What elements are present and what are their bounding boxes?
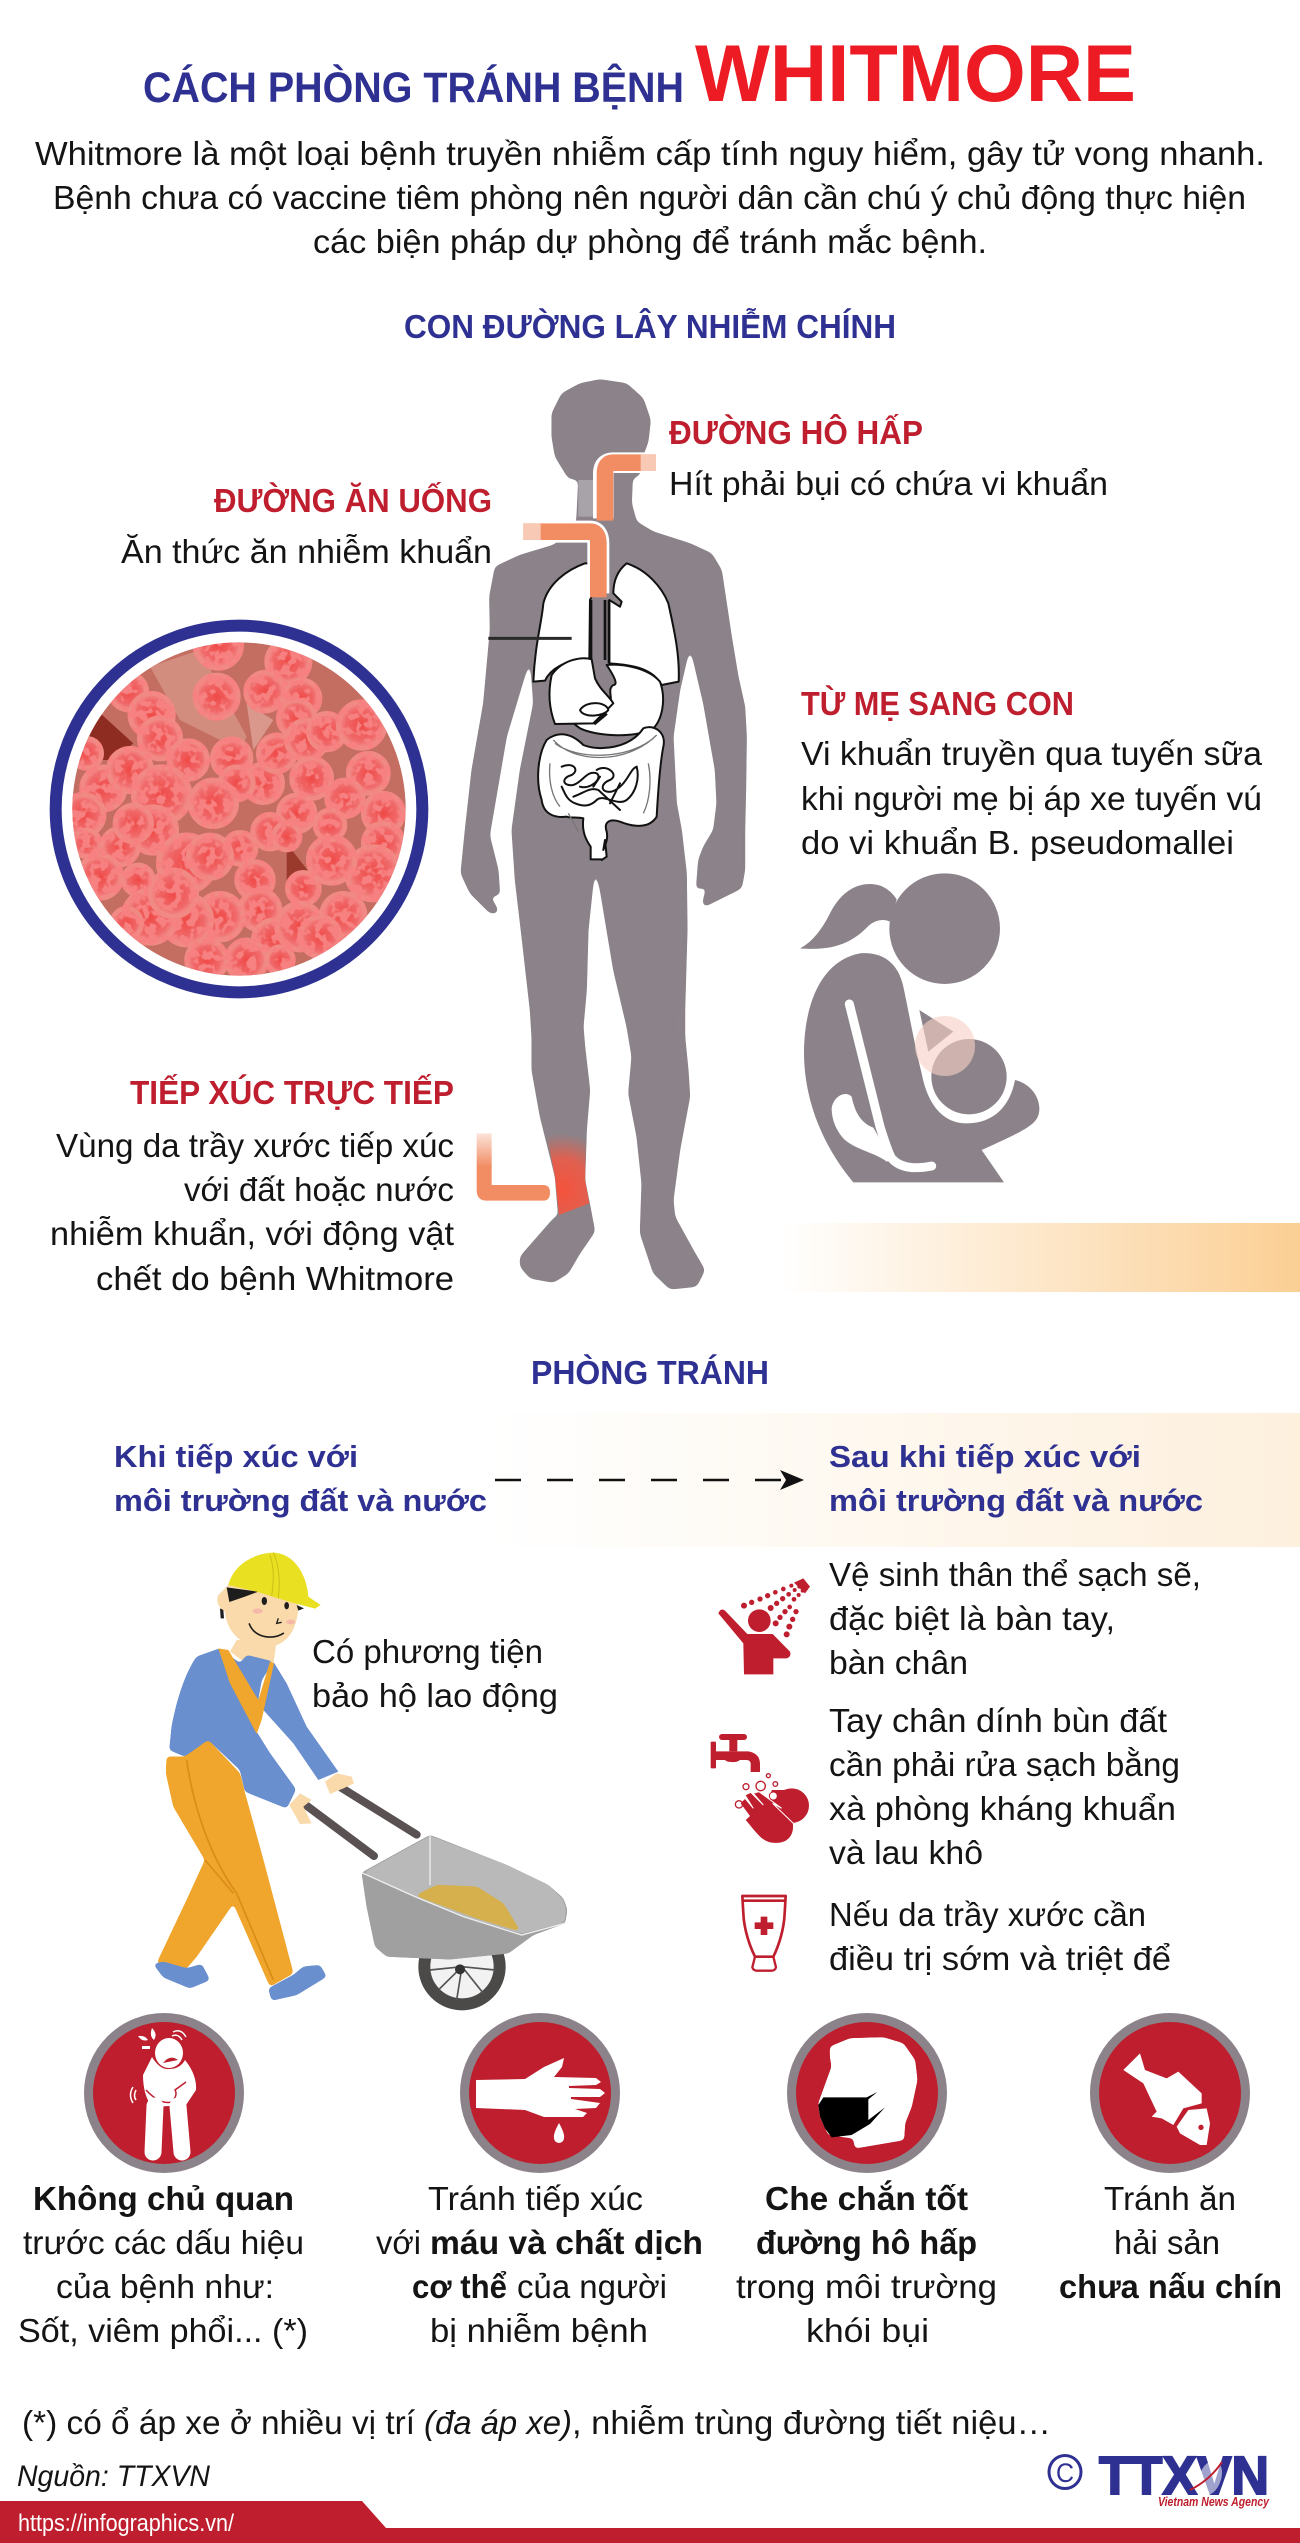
icon: head with mask [792, 2018, 942, 2168]
icon: ointment tube [742, 1896, 786, 1971]
icon: breastfeeding mother [800, 873, 1039, 1182]
cream decorative band [490, 1413, 1300, 1547]
text: protective equipment: Có phương tiện [312, 1633, 543, 1670]
label: direct contact route [50, 1074, 454, 1297]
text: do not be complacent: trước các dấu hiệu [23, 2224, 304, 2261]
text: body hygiene: Vệ sinh thân thể sạch sẽ, [829, 1556, 1201, 1593]
icon: shower [718, 1578, 810, 1674]
text: body hygiene: đặc biệt là bàn tay, [829, 1600, 1115, 1637]
text: cover respiratory tract [736, 2180, 997, 2349]
text: avoid blood contact: máu và chất dịch [430, 2224, 703, 2261]
text: cover respiratory tract: Che chắn tốt [765, 2180, 968, 2217]
text: do not be complacent: Không chủ quan [33, 2180, 294, 2217]
title: CÁCH PHÒNG TRÁNH BỆNH [143, 63, 684, 112]
intro paragraph: Bệnh chưa có vaccine tiêm phòng nên người dân cần chú ý chủ động thực hiện [53, 179, 1246, 216]
label: direct contact route: nhiễm khuẩn, với động vật [50, 1215, 454, 1252]
text: washing hands: cần phải rửa sạch bằng [829, 1746, 1180, 1783]
text: avoid undercooked seafood: hải sản [1114, 2224, 1220, 2261]
worker neck and face [217, 1583, 304, 1673]
footnote: (đa áp xe) [424, 2404, 572, 2441]
route pipe: digestive [523, 523, 598, 597]
esophagus [591, 600, 609, 663]
icon: bleeding hand [464, 2018, 616, 2168]
text: washing hands: xà phòng kháng khuẩn [829, 1790, 1176, 1827]
label: ingestion route: Ăn thức ăn nhiễm khuẩn [121, 533, 492, 570]
text: cover respiratory tract: trong môi trường [736, 2268, 997, 2305]
overalls [157, 1648, 293, 1987]
label: respiratory route: Hít phải bụi có chứa vi khuẩn [669, 465, 1108, 502]
text: body hygiene: bàn chân [829, 1644, 968, 1681]
intro paragraph: các biện pháp dự phòng để tránh mắc bệnh. [313, 223, 987, 260]
text: avoid blood contact: với [376, 2224, 421, 2261]
icon: faucet and washing hands [711, 1734, 809, 1843]
text: washing hands: và lau khô [829, 1834, 983, 1871]
logo: TTXVN: TTXVN [1099, 2446, 1269, 2506]
shoes [153, 1962, 327, 2001]
intro paragraph: Whitmore là một loại bệnh truyền nhiễm cấp tính nguy hiểm, gây tử vong nhanh. [35, 135, 1265, 172]
wheel [424, 1929, 500, 2004]
barrow handles [306, 1787, 417, 1856]
orange decorative band [780, 1223, 1300, 1292]
text: avoid undercooked seafood [1059, 2180, 1282, 2305]
source: Nguồn: TTXVN [17, 2460, 210, 2493]
text: protective equipment [312, 1633, 558, 1714]
label: respiratory route: ĐƯỜNG HÔ HẤP [669, 413, 923, 451]
footer bar [0, 2501, 1300, 2543]
text: do not be complacent: của bệnh như: [56, 2268, 274, 2305]
illustration: worker with wheelbarrow [153, 1553, 567, 2004]
pointer line [488, 634, 572, 643]
subheading: during contact: Khi tiếp xúc với [114, 1439, 358, 1474]
liver and stomach [549, 658, 663, 735]
logo: TTXVN: Vietnam News Agency [1158, 2494, 1270, 2509]
hands [289, 1773, 354, 1824]
route pipe: respiratory [603, 454, 656, 521]
text: treat skin abrasions: điều trị sớm và triệt để [829, 1940, 1171, 1977]
subheading: during contact: môi trường đất và nước [114, 1483, 487, 1518]
text: avoid blood contact [376, 2180, 703, 2349]
text: treat skin abrasions [829, 1896, 1171, 1977]
label: direct contact route: với đất hoặc nước [184, 1171, 454, 1208]
subheading: after contact: Sau khi tiếp xúc với [829, 1439, 1141, 1474]
text: protective equipment: bảo hộ lao động [312, 1677, 558, 1714]
label: mother to child route: Vi khuẩn truyền qua tuyến sữa [801, 735, 1263, 772]
text: body hygiene [829, 1556, 1201, 1681]
helmet [228, 1553, 321, 1609]
text: cover respiratory tract: khói bụi [806, 2312, 929, 2349]
label: mother to child route: TỪ MẸ SANG CON [801, 685, 1074, 722]
label: direct contact route: TIẾP XÚC TRỰC TIẾP [130, 1074, 454, 1111]
intestines [538, 727, 664, 860]
heading: main transmission routes: CON ĐƯỜNG LÂY NHIỄM CHÍNH [404, 308, 896, 345]
subheading: after contact: môi trường đất và nước [829, 1483, 1203, 1518]
body diagram [461, 379, 747, 1289]
label: ingestion route [121, 481, 492, 570]
silhouette [461, 379, 747, 1289]
text: washing hands: Tay chân dính bùn đất [829, 1702, 1167, 1739]
text: avoid undercooked seafood: chưa nấu chín [1059, 2268, 1282, 2305]
footnote: , nhiễm trùng đường tiết niệu… [572, 2404, 1051, 2441]
label: ingestion route: ĐƯỜNG ĂN UỐNG [214, 481, 492, 519]
lungs [533, 563, 679, 685]
bacteria photo in ring [56, 622, 422, 992]
title: WHITMORE [695, 29, 1136, 119]
arrow: dashed [495, 1470, 804, 1490]
label: mother to child route: khi người mẹ bị áp xe tuyến vú [801, 780, 1262, 817]
neck highlight [578, 480, 595, 517]
footnote [22, 2404, 1051, 2441]
worker far arm [263, 1662, 338, 1780]
heading: prevention: PHÒNG TRÁNH [531, 1354, 769, 1391]
label: mother to child route: do vi khuẩn B. pseudomallei [801, 824, 1234, 861]
label: direct contact route: Vùng da trầy xước tiếp xúc [56, 1127, 454, 1164]
text: cover respiratory tract: đường hô hấp [756, 2224, 977, 2261]
icon: fish [1094, 2018, 1246, 2168]
intro paragraph [35, 135, 1265, 260]
text: avoid undercooked seafood: Tránh ăn [1104, 2180, 1236, 2217]
infected shin [546, 1132, 589, 1215]
label: respiratory route [669, 413, 1108, 502]
subheading: after contact [829, 1439, 1203, 1518]
icon: sick person [88, 2018, 240, 2168]
logo: TTXVN: C [1056, 2458, 1074, 2488]
text: do not be complacent: Sốt, viêm phổi... (*) [18, 2312, 308, 2349]
footer bar: https://infographics.vn/ [18, 2510, 234, 2537]
footnote: (*) có ổ áp xe ở nhiều vị trí [22, 2404, 415, 2441]
text: treat skin abrasions: Nếu da trầy xước cần [829, 1896, 1146, 1933]
text: do not be complacent [18, 2180, 308, 2349]
text: avoid blood contact: bị nhiễm bệnh [430, 2312, 648, 2349]
subheading: during contact [114, 1439, 487, 1518]
text: washing hands [829, 1702, 1180, 1871]
label: mother to child route [801, 685, 1263, 861]
barrow tray [362, 1835, 567, 1959]
title [143, 29, 1136, 119]
route pipe: direct contact [477, 1133, 550, 1201]
text: avoid blood contact: cơ thể [412, 2268, 507, 2305]
text: avoid blood contact: của người [517, 2268, 667, 2305]
text: avoid blood contact: Tránh tiếp xúc [428, 2180, 643, 2217]
worker shirt [169, 1648, 296, 1808]
label: direct contact route: chết do bệnh Whitmore [96, 1260, 454, 1297]
